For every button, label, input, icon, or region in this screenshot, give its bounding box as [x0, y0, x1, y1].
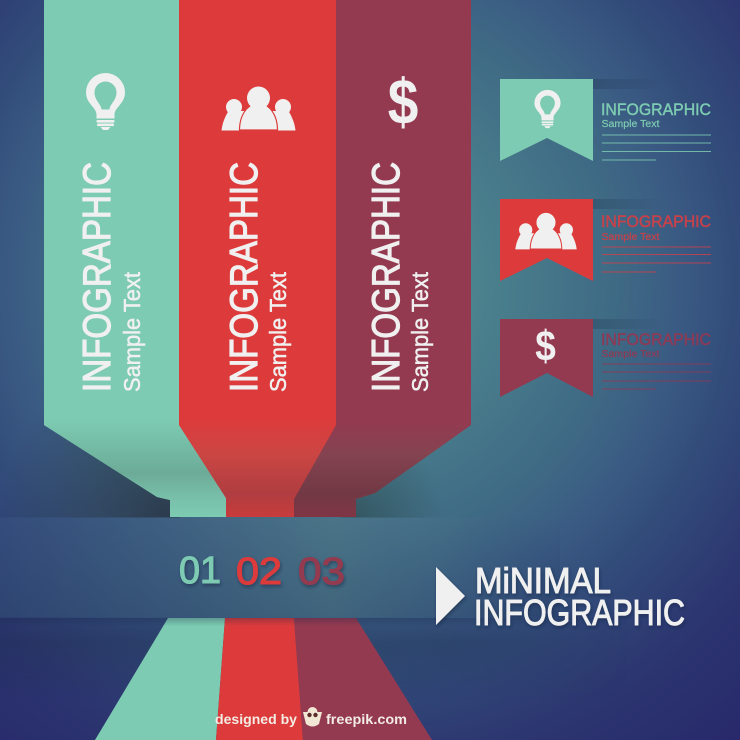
panel: teal column — [44, 0, 240, 517]
number 03: 03 — [298, 551, 345, 593]
footer credit: freepik.com — [326, 712, 407, 727]
panel: lower rays — [95, 618, 432, 740]
icon: people — [222, 86, 296, 130]
text lines — [602, 364, 711, 389]
icon: small dollar: $ — [535, 323, 556, 370]
panel: ribbon item 2 — [500, 199, 711, 281]
ribbon subheading: Sample Text — [602, 119, 660, 130]
icon: light bulb — [86, 73, 125, 130]
ribbon subheading: Sample Text — [602, 349, 660, 360]
column text: teal — [76, 162, 145, 392]
column text: maroon — [365, 162, 433, 392]
text lines — [602, 247, 711, 272]
panel: red column — [179, 0, 336, 517]
arrow — [436, 567, 465, 625]
column text: teal: INFOGRAPHIC — [76, 162, 119, 392]
number 01: 01 — [179, 550, 221, 592]
main title — [474, 560, 685, 633]
ribbon red — [500, 199, 593, 281]
text lines — [602, 135, 711, 160]
column text: red — [223, 162, 291, 392]
column text: red: INFOGRAPHIC — [223, 162, 266, 392]
ribbon subheading: Sample Text — [602, 232, 660, 243]
icon: small people — [515, 213, 577, 249]
main title: INFOGRAPHIC — [474, 592, 685, 633]
footer credit: designed by — [215, 712, 298, 727]
panel: maroon column — [280, 0, 471, 517]
icon: freepik mascot — [303, 707, 322, 726]
ribbon heading: INFOGRAPHIC — [601, 330, 711, 349]
shadow under band — [0, 618, 532, 625]
column text: maroon: INFOGRAPHIC — [365, 162, 408, 392]
column text: maroon: Sample Text — [407, 271, 433, 392]
ribbon teal — [500, 79, 593, 161]
footer credit — [215, 707, 407, 727]
number 02: 02 — [236, 551, 282, 593]
main title: MiNIMAL — [475, 560, 611, 601]
icon: dollar: $ — [388, 66, 418, 137]
ribbon heading: INFOGRAPHIC — [601, 100, 711, 119]
panel: horizontal band — [0, 518, 740, 618]
ribbon heading: INFOGRAPHIC — [601, 212, 711, 231]
column text: teal: Sample Text — [119, 271, 145, 392]
icon: small bulb — [534, 90, 561, 128]
panel: ribbon item 3 — [500, 319, 711, 397]
column text: red: Sample Text — [265, 271, 291, 392]
ribbon maroon — [500, 319, 593, 397]
shadow behind columns — [0, 400, 740, 700]
panel: ribbon item 1 — [500, 79, 711, 161]
